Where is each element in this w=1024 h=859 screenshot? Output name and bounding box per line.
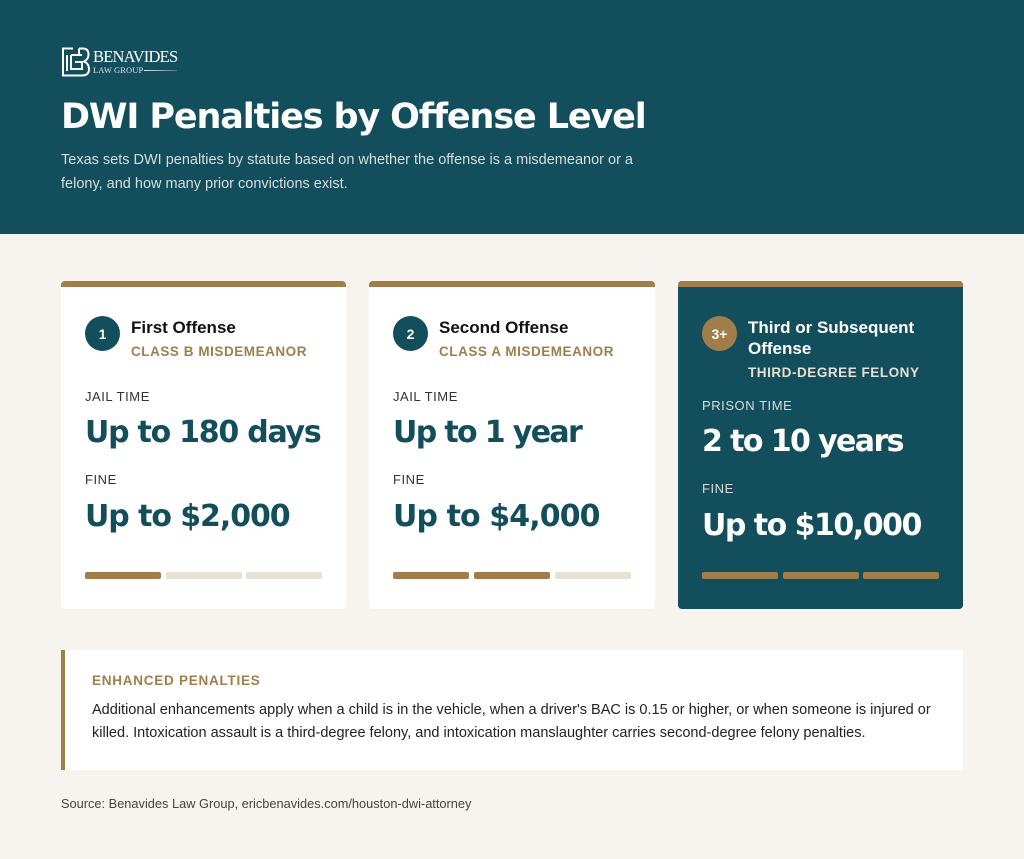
jail value: Up to 1 year [393,415,581,450]
badge 2 [393,316,428,351]
header band [0,0,1024,234]
card heading: Third or Subsequent [748,318,914,337]
callout text: Additional enhancements apply when a child is in the vehicle, when a driver's BAC is 0.15 or higher, or when someone is injured or [92,702,931,718]
fine value: Up to $10,000 [702,508,921,543]
logo [62,47,178,76]
fine label: FINE [85,472,117,487]
card heading: First Offense [131,318,236,337]
card heading: Second Offense [439,318,568,337]
panel: second offense [369,281,655,609]
badge 3+: 3+ [712,326,727,342]
badge 3+ [702,316,737,351]
prison value: 2 to 10 years [702,424,903,459]
subtitle [61,152,633,192]
subtitle: Texas sets DWI penalties by statute based on whether the offense is a misdemeanor or a [61,152,633,168]
severity meter [393,572,631,579]
card heading [748,318,914,358]
callout text [92,702,931,741]
panel: third offense [678,281,963,609]
classification: CLASS A MISDEMEANOR [439,344,614,359]
fine value: Up to $2,000 [85,499,290,534]
icon: logo mark [62,48,90,76]
fine label: FINE [393,472,425,487]
badge 2: 2 [407,326,414,342]
subtitle: felony, and how many prior convictions exist. [61,176,348,192]
title: DWI Penalties by Offense Level [61,97,646,137]
callout heading: ENHANCED PENALTIES [92,673,261,688]
callout text: killed. Intoxication assault is a third-degree felony, and intoxication manslaughter carries second-degree felony penalties. [92,725,866,741]
jail label: JAIL TIME [85,389,150,404]
source note: Source: Benavides Law Group, ericbenavides.com/houston-dwi-attorney [61,796,471,811]
fine label: FINE [702,481,734,496]
panel: enhanced penalties [61,650,963,770]
severity meter [85,572,322,579]
card heading: Offense [748,339,811,358]
logo name: BENAVIDES [93,47,177,66]
prison label: PRISON TIME [702,398,792,413]
fine value: Up to $4,000 [393,499,600,534]
badge 1: 1 [99,326,106,342]
severity meter [702,572,939,579]
jail label: JAIL TIME [393,389,458,404]
jail value: Up to 180 days [85,415,320,450]
panel: first offense [61,281,346,609]
badge 1 [85,316,120,351]
logo subtitle: LAW GROUP [93,65,143,75]
classification: THIRD-DEGREE FELONY [748,365,920,380]
classification: CLASS B MISDEMEANOR [131,344,307,359]
